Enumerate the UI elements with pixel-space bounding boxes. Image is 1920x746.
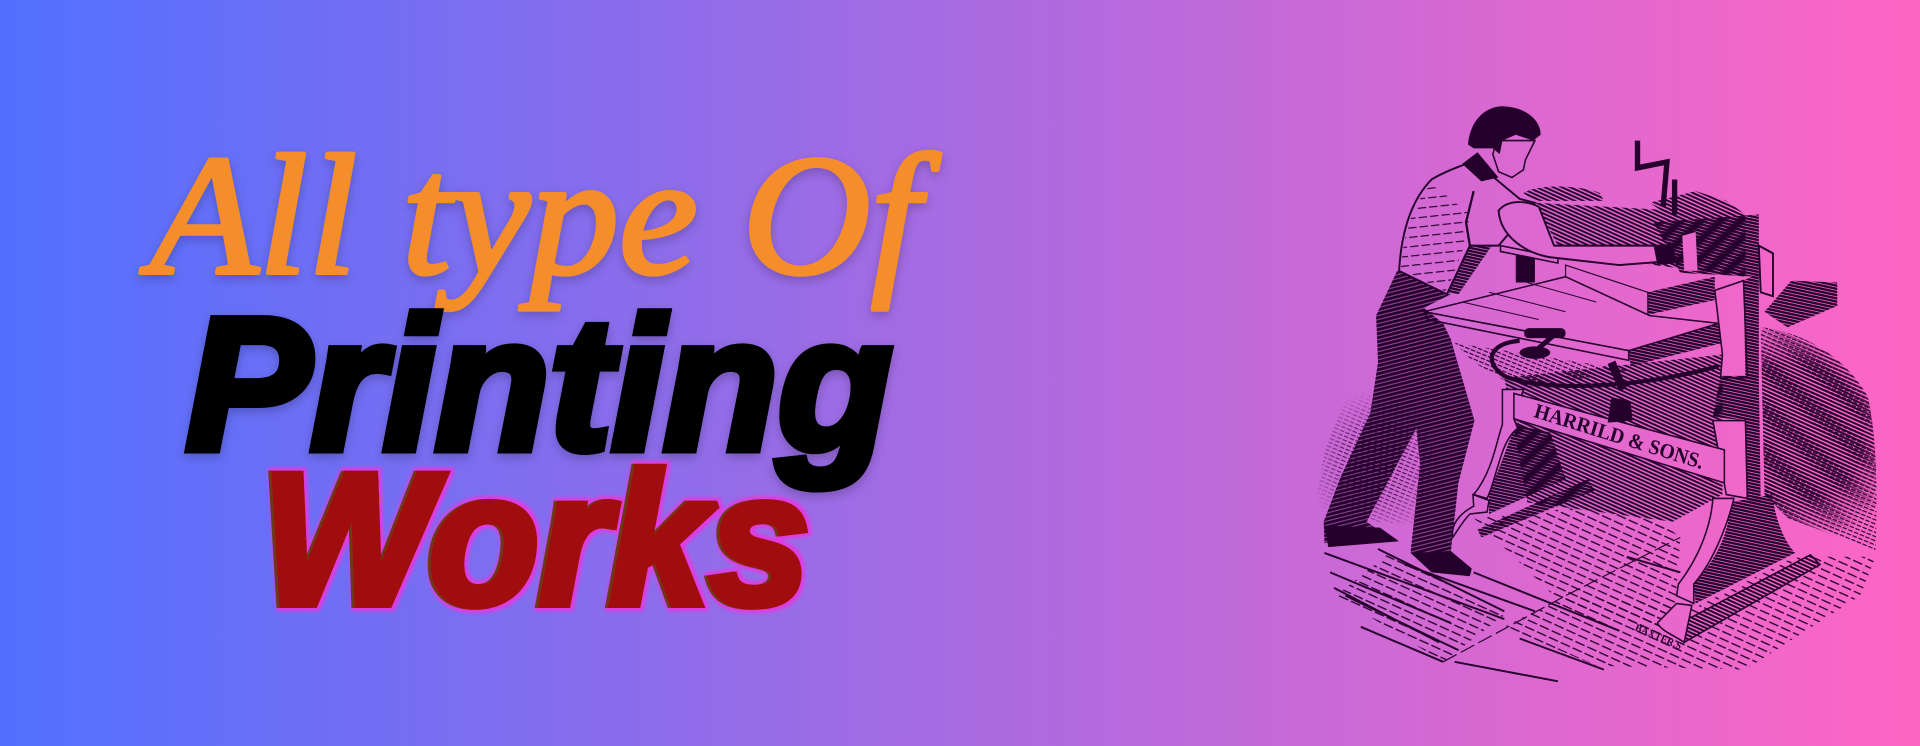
- man: vest and torso: [1399, 160, 1535, 294]
- illustration: man operating printing press: [1317, 106, 1877, 681]
- press: hand wheel and spindle: [1492, 328, 1719, 423]
- title: All type Of: All type Of: [140, 121, 941, 311]
- floorboards: [1324, 502, 1876, 681]
- title: Works: Works: [262, 434, 810, 644]
- man: far arm: [1443, 236, 1499, 294]
- engraver signature: BAXTER.S: [1633, 623, 1683, 653]
- floor shadow hatching: [1317, 327, 1877, 551]
- man: hand: [1654, 244, 1677, 265]
- press: main column: [1713, 273, 1761, 502]
- man: trousers: [1324, 271, 1474, 553]
- man: neck: [1462, 152, 1499, 181]
- press: back frame and tray: [1500, 187, 1837, 327]
- title: Printing: Printing: [186, 279, 892, 489]
- man: face: [1493, 141, 1535, 178]
- press: crank handle: [1637, 141, 1675, 214]
- press: right leg and foot: [1657, 495, 1820, 642]
- press: left leg: [1452, 390, 1594, 537]
- man: reaching arm: [1499, 202, 1669, 265]
- man: hair: [1468, 106, 1541, 154]
- press: head block: [1566, 265, 1715, 316]
- press: HARRILD & SONS beam: HARRILD & SONS.: [1532, 398, 1707, 474]
- press: table: [1424, 277, 1722, 366]
- man: shoes: [1324, 526, 1472, 576]
- banner artwork: [136, 106, 1877, 682]
